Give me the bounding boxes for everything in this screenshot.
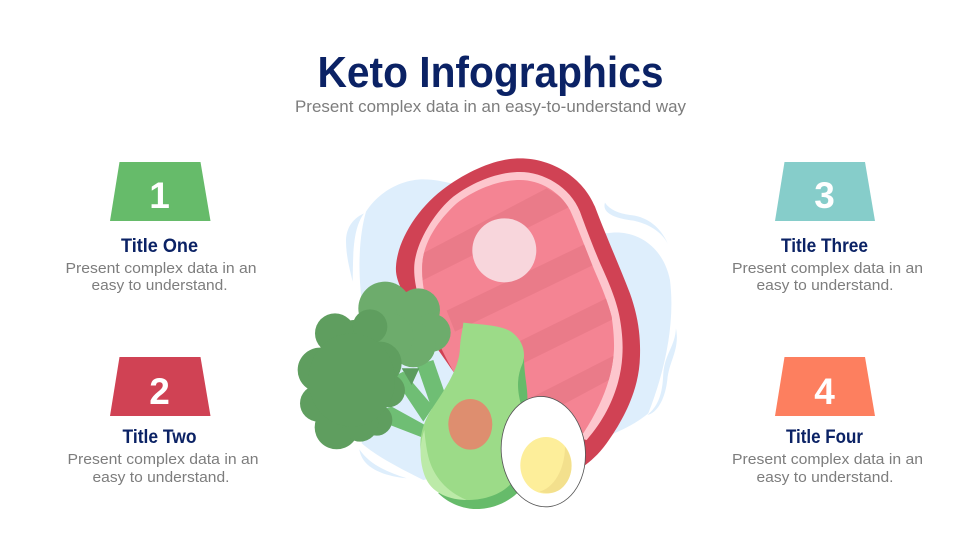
avocado skin [438, 358, 527, 509]
text: description one: Present complex data in an [66, 260, 256, 277]
icon: teal badge 3 [775, 162, 875, 221]
text: description four: easy to understand. [756, 469, 894, 486]
egg white [496, 392, 591, 511]
broccoli [298, 282, 451, 449]
steak meat [422, 180, 614, 433]
broccoli stems [387, 360, 447, 437]
avocado pit [448, 399, 492, 450]
steak fat [414, 172, 623, 440]
text: description three: easy to understand. [756, 277, 894, 294]
heading: title four: Title Four [786, 427, 864, 448]
background blob [346, 179, 677, 480]
title: Keto Infographics [318, 48, 664, 97]
heading: title three: Title Three [781, 236, 868, 257]
icon: orange badge 4 [775, 357, 875, 416]
steak [396, 158, 640, 467]
panel: item four [732, 357, 923, 486]
egg yolk [520, 437, 572, 494]
broccoli back floret [358, 282, 451, 367]
panel: item three [732, 162, 923, 294]
illustration: keto foods [298, 158, 677, 511]
steak bone [472, 218, 536, 282]
icon: red badge 2: 2 [149, 371, 170, 412]
panel: item two [68, 357, 258, 486]
avocado [420, 323, 527, 509]
broccoli front floret [298, 309, 405, 449]
subtitle: Present complex data in an easy-to-understand way [295, 97, 686, 116]
icon: orange badge 4: 4 [814, 371, 835, 412]
avocado highlight [421, 430, 467, 500]
text: description one: easy to understand. [92, 277, 228, 294]
icon: teal badge 3: 3 [814, 175, 835, 216]
egg [496, 392, 591, 511]
egg yolk shadow [539, 447, 572, 493]
panel: item one [66, 162, 256, 294]
heading: title two: Title Two [122, 427, 196, 448]
text: description four: Present complex data in an [732, 451, 923, 468]
text: description two: easy to understand. [92, 469, 230, 486]
steak rim [396, 158, 640, 467]
avocado flesh [420, 323, 526, 500]
icon: green badge 1 [110, 162, 210, 221]
heading: title one: Title One [121, 236, 198, 257]
icon: green badge 1: 1 [149, 175, 170, 216]
text: description two: Present complex data in an [68, 451, 258, 468]
icon: red badge 2 [110, 357, 210, 416]
steak stripes [417, 188, 618, 412]
text: description three: Present complex data in an [732, 260, 923, 277]
